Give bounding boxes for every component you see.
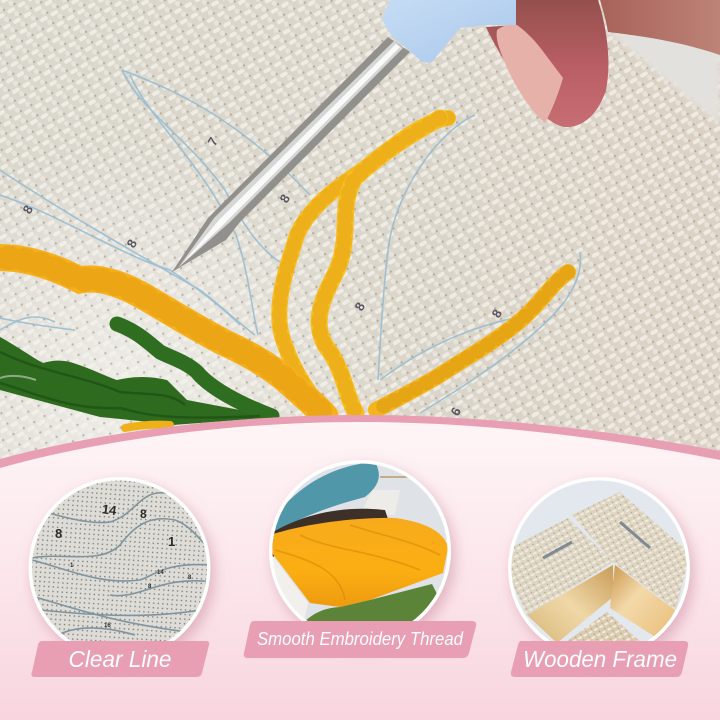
label: wooden frame xyxy=(511,641,688,677)
printed numbers on cloth: 7 xyxy=(204,135,221,148)
label: smooth embroidery thread xyxy=(244,621,476,658)
punch needle handle xyxy=(382,0,516,63)
photo: needle punching yarn into canvas xyxy=(0,0,720,480)
circle photo: printed canvas: 8 xyxy=(140,507,147,521)
circle photo: printed canvas: 8 xyxy=(148,584,152,590)
printed numbers on cloth: 8 xyxy=(19,203,36,216)
circle photo: printed canvas xyxy=(28,477,212,661)
blue pattern lines xyxy=(0,70,580,413)
printed numbers on cloth: 8 xyxy=(351,300,368,313)
thumb xyxy=(486,0,608,127)
circle photo: printed canvas: 16 xyxy=(104,623,111,629)
printed numbers on cloth: 6 xyxy=(447,405,464,418)
punch needle shaft xyxy=(172,37,410,272)
label: smooth embroidery thread: Smooth Embroidery Thread xyxy=(257,629,464,649)
circle photo: printed canvas: 8 xyxy=(188,575,192,581)
printed numbers on cloth: 8 xyxy=(276,192,293,205)
yellow yarn stitches xyxy=(0,118,568,428)
green yarn stitches xyxy=(0,324,277,425)
feature: wooden frame xyxy=(508,477,692,677)
canvas cloth xyxy=(0,0,720,480)
label: clear line: Clear Line xyxy=(68,646,172,672)
circle photo: printed canvas: 1 xyxy=(70,563,74,569)
label: clear line xyxy=(31,641,209,677)
printed numbers on cloth: 8 xyxy=(488,307,505,320)
bottom pink panel with curved edge xyxy=(0,415,720,720)
feature: clear line xyxy=(28,477,212,677)
label: wooden frame: Wooden Frame xyxy=(523,646,677,672)
circle photo: frame corner xyxy=(508,477,692,661)
circle photo: printed canvas: 1 xyxy=(168,534,175,549)
printed numbers on cloth: 8 xyxy=(123,237,140,250)
printed numbers on cloth xyxy=(19,135,505,418)
circle photo: yarn skeins xyxy=(268,460,452,650)
background beyond cloth edge xyxy=(606,28,720,125)
second finger xyxy=(600,0,720,55)
circle photo: printed canvas: 8 xyxy=(55,526,62,541)
feature: smooth embroidery thread xyxy=(244,460,476,658)
circle photo: printed canvas: 14 xyxy=(101,501,118,518)
thumbnail xyxy=(497,25,563,123)
circle photo: printed canvas: 14 xyxy=(157,570,164,576)
